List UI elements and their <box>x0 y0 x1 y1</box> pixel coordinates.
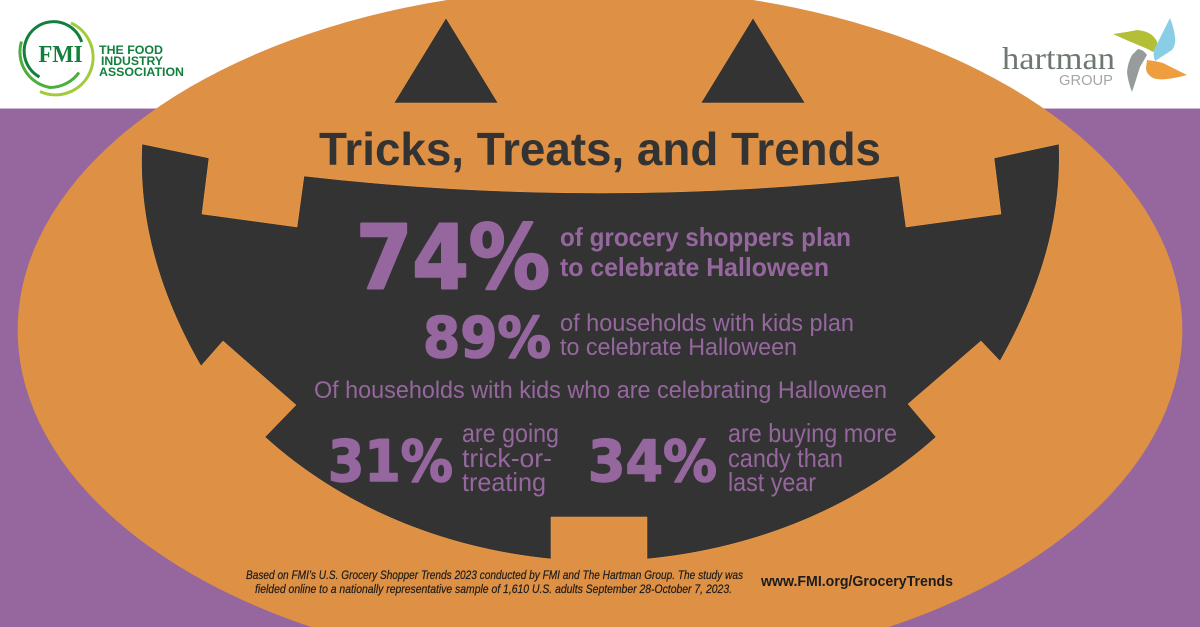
stat description 34% <box>728 418 897 497</box>
logo association name: INDUSTRY <box>101 54 163 68</box>
stat description 74%: of grocery shoppers plan <box>560 222 851 252</box>
website url: www.FMI.org/GroceryTrends <box>760 574 953 590</box>
stat description 34%: are buying more <box>728 418 897 448</box>
stat: 89 percent of households with kids <box>423 306 854 371</box>
stat number 89%: 89% <box>423 306 551 371</box>
stat description 89%: to celebrate Halloween <box>560 334 797 361</box>
stat description 31%: treating <box>462 467 546 497</box>
stat description 74% <box>560 222 851 282</box>
pumpkin mouth <box>142 144 1059 559</box>
pumpkin left eye <box>394 18 498 103</box>
stat description 31% <box>462 418 559 497</box>
logo association name: THE FOOD <box>99 43 163 57</box>
logo rings <box>20 22 93 95</box>
logo FMI lettering: FMI <box>38 42 82 68</box>
title: Tricks, Treats, and Trends <box>319 123 881 175</box>
FMI logo <box>20 22 184 95</box>
footnote: fielded online to a nationally representative sample of 1,610 U.S. adults September 28-October 7, 2023. <box>255 582 732 596</box>
logo pinwheel <box>1113 18 1187 92</box>
pumpkin right eye <box>701 18 805 103</box>
stat: 74 percent of grocery shoppers <box>356 206 851 309</box>
stat description 34%: last year <box>728 467 816 497</box>
stat description 74%: to celebrate Halloween <box>560 252 829 282</box>
stat description 89%: of households with kids plan <box>560 310 854 337</box>
stat number 74%: 74% <box>356 206 550 309</box>
stat description 31%: trick-or- <box>462 443 552 473</box>
stat description 31%: are going <box>462 418 559 448</box>
stat number 31%: 31% <box>328 429 453 495</box>
stat: 34 percent buying more candy <box>588 418 897 497</box>
Hartman Group logo <box>1002 18 1187 92</box>
footnote <box>246 568 743 596</box>
footnote: Based on FMI’s U.S. Grocery Shopper Trends 2023 conducted by FMI and The Hartman Group. The study was <box>246 568 743 582</box>
logo association name: ASSOCIATION <box>99 65 184 79</box>
stat: 31 percent trick-or-treating <box>328 418 559 497</box>
logo hartman wordmark: hartman <box>1002 40 1115 76</box>
logo GROUP wordmark: GROUP <box>1059 72 1113 89</box>
stat description 34%: candy than <box>728 443 843 473</box>
logo association name <box>99 43 184 79</box>
stat description 89% <box>560 310 854 361</box>
stat number 34%: 34% <box>588 429 717 495</box>
subheading: Of households with kids who are celebrating Halloween <box>314 377 887 404</box>
